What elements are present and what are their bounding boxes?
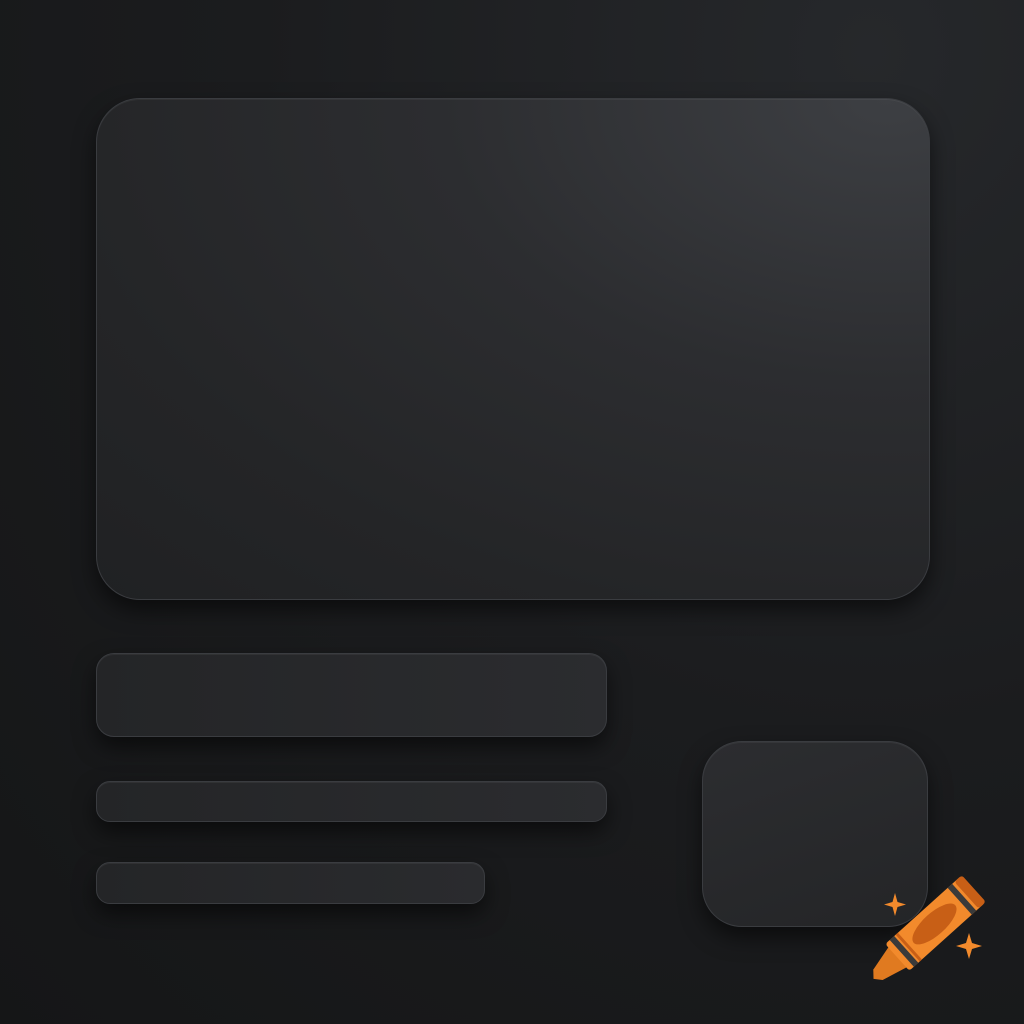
panel: square card — [702, 741, 928, 927]
panel: main hero card — [96, 98, 930, 600]
panel: wide bar 1 — [96, 653, 607, 737]
panel: bar 2 — [96, 781, 607, 822]
panel: bar 3 — [96, 862, 485, 904]
icon: crayon with sparkles — [873, 876, 985, 980]
